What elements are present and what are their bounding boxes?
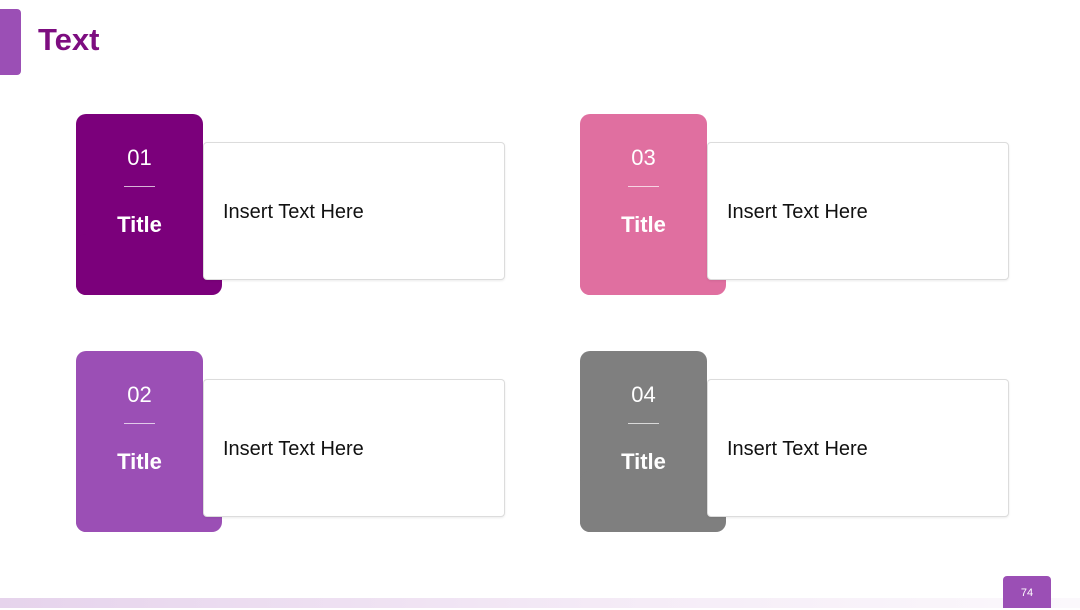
title: Text [38,22,99,57]
card 02: Title [117,449,162,474]
page number: 74 [1021,587,1033,599]
card 01: Insert Text Here [223,201,364,223]
card 03: Title [621,212,666,237]
card 01: Title [117,212,162,237]
card 03: Insert Text Here [727,201,868,223]
page number [1003,576,1051,608]
card 01 [76,114,505,295]
card 04 [580,351,1009,532]
card 02: Insert Text Here [223,438,364,460]
card 04: Title [621,449,666,474]
card 01: 01 [127,145,152,170]
card 03 [580,114,1009,295]
header accent bar [0,9,21,75]
card 04: 04 [631,382,656,407]
card 02 [76,351,505,532]
card 02: 02 [127,382,152,407]
footer gradient bar [0,598,1080,608]
card 03: 03 [631,145,656,170]
card 04: Insert Text Here [727,438,868,460]
